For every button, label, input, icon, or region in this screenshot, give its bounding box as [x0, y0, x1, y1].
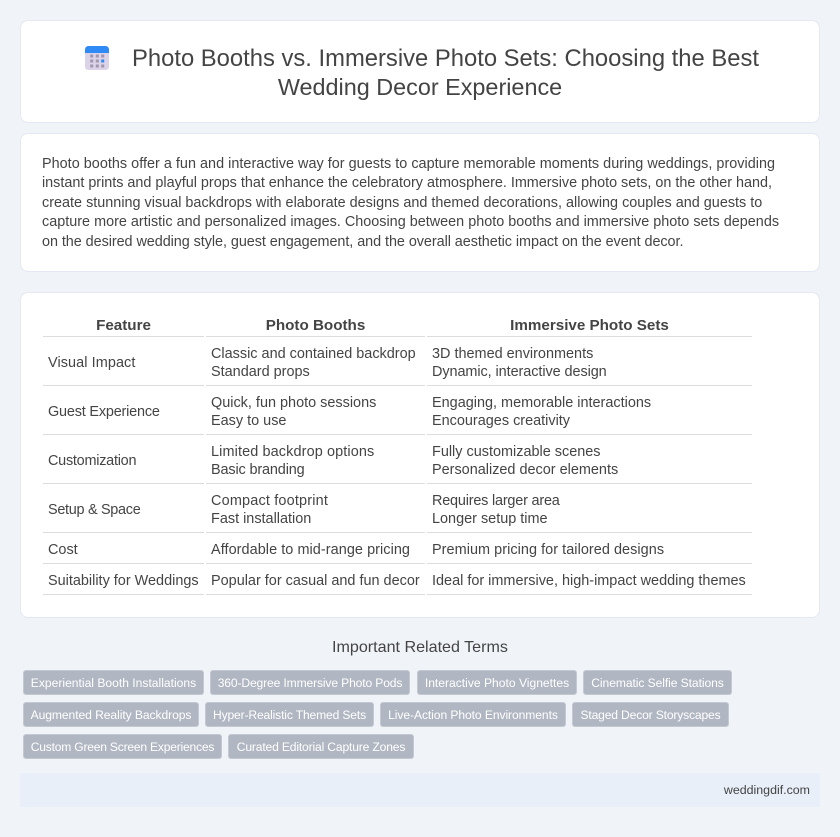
cell: Setup & Space, Immersive Photo Sets: Requires larger area: [432, 493, 560, 509]
tag: [205, 702, 374, 727]
tag: Interactive Photo Vignettes: [425, 676, 569, 690]
tag: [23, 670, 204, 695]
cell: Guest Experience, Photo Booths: Easy to use: [211, 413, 286, 429]
panel: header: [20, 20, 820, 123]
cell: Setup & Space, Photo Booths: Compact footprint: [211, 493, 328, 509]
tag: Augmented Reality Backdrops: [31, 708, 191, 722]
tags: related terms: [23, 670, 732, 759]
tag: [572, 702, 729, 727]
row: Customization: Customization: [48, 453, 136, 469]
cell: Visual Impact, Immersive Photo Sets: Dynamic, interactive design: [432, 364, 607, 380]
text block: introduction paragraph: on the desired wedding style, guest engagement, and the overall aesthetic impact on the event decor.: [42, 234, 683, 250]
cell: Visual Impact, Photo Booths: Standard props: [211, 364, 310, 380]
tag: [23, 734, 222, 759]
cell: Guest Experience, Immersive Photo Sets: Encourages creativity: [432, 413, 570, 429]
row: Cost: Cost: [48, 542, 78, 558]
title: Photo Booths vs. Immersive Photo Sets: Choosing the Best: [132, 45, 759, 72]
tag: Custom Green Screen Experiences: [31, 740, 214, 754]
cell: Customization, Photo Booths: Limited backdrop options: [211, 444, 374, 460]
title: Wedding Decor Experience: [278, 74, 562, 100]
tag: Hyper-Realistic Themed Sets: [213, 708, 366, 722]
cell: Customization, Immersive Photo Sets: Personalized decor elements: [432, 462, 618, 478]
cell: Visual Impact, Photo Booths: [211, 346, 416, 380]
tag: [23, 702, 199, 727]
panel: introduction: [20, 133, 820, 272]
tag: [228, 734, 414, 759]
cell: Setup & Space, Immersive Photo Sets: Longer setup time: [432, 511, 548, 527]
tag: Experiential Booth Installations: [31, 676, 196, 690]
cell: Cost, Photo Booths: Affordable to mid-range pricing: [211, 542, 410, 558]
footer bar: [20, 773, 820, 807]
cell: Setup & Space, Immersive Photo Sets: [432, 493, 560, 527]
text block: introduction paragraph: instant prints and playful props that enhance the celebratory atmosphere. Immersive photo sets, on the other hand,: [42, 175, 772, 191]
text block: introduction paragraph: create stunning visual backdrops with elaborate designs and themed decorations, allowing couples and guests to: [42, 195, 762, 211]
cell: Customization, Immersive Photo Sets: [432, 444, 618, 478]
cell: Cost, Immersive Photo Sets: Premium pricing for tailored designs: [432, 542, 664, 558]
tag: Staged Decor Storyscapes: [580, 708, 721, 722]
cell: Guest Experience, Photo Booths: Quick, fun photo sessions: [211, 395, 376, 411]
cell: Setup & Space, Photo Booths: Fast installation: [211, 511, 311, 527]
tag: [583, 670, 732, 695]
heading: Important Related Terms: Important Related Terms: [332, 638, 508, 656]
text block: introduction paragraph: capture more artistic and personalized images. Choosing between photo booths and immersive photo sets depends: [42, 214, 779, 230]
cell: Customization, Immersive Photo Sets: Fully customizable scenes: [432, 444, 601, 460]
panel: comparison table: [20, 292, 820, 618]
cell: Visual Impact, Photo Booths: Classic and contained backdrop: [211, 346, 416, 362]
tag: [380, 702, 566, 727]
cell: Guest Experience, Immersive Photo Sets: Engaging, memorable interactions: [432, 395, 651, 411]
cell: Visual Impact, Immersive Photo Sets: 3D themed environments: [432, 346, 593, 362]
cell: Visual Impact, Immersive Photo Sets: [432, 346, 607, 380]
tag: [417, 670, 577, 695]
cell: Guest Experience, Photo Booths: [211, 395, 376, 429]
table header: Immersive Photo Sets: Immersive Photo Sets: [510, 317, 669, 334]
cell: Setup & Space, Photo Booths: [211, 493, 328, 527]
text block: introduction paragraph: Photo booths offer a fun and interactive way for guests to capture memorable moments during weddings, providing: [42, 156, 775, 172]
icon: calendar: [85, 46, 109, 70]
table header: Photo Booths: Photo Booths: [266, 317, 365, 334]
row: Suitability for Weddings: Suitability for Weddings: [48, 573, 199, 589]
cell: Guest Experience, Immersive Photo Sets: [432, 395, 651, 429]
row: Guest Experience: Guest Experience: [48, 404, 160, 420]
cell: Customization, Photo Booths: [211, 444, 374, 478]
cell: Customization, Photo Booths: Basic branding: [211, 462, 305, 478]
tag: [210, 670, 410, 695]
cell: Suitability, Photo Booths: Popular for casual and fun decor: [211, 573, 420, 589]
footer: site name: weddingdif.com: [724, 783, 810, 797]
table header: Feature: Feature: [96, 317, 151, 334]
row: Visual Impact: Visual Impact: [48, 355, 135, 371]
title: [132, 45, 759, 100]
tag: Curated Editorial Capture Zones: [237, 740, 405, 754]
tag: 360-Degree Immersive Photo Pods: [218, 676, 402, 690]
cell: Suitability, Immersive Photo Sets: Ideal for immersive, high-impact wedding themes: [432, 573, 746, 589]
text block: introduction paragraph: [42, 156, 779, 250]
tag: Live-Action Photo Environments: [388, 708, 558, 722]
tag: Cinematic Selfie Stations: [591, 676, 724, 690]
row: Setup & Space: Setup & Space: [48, 502, 140, 518]
